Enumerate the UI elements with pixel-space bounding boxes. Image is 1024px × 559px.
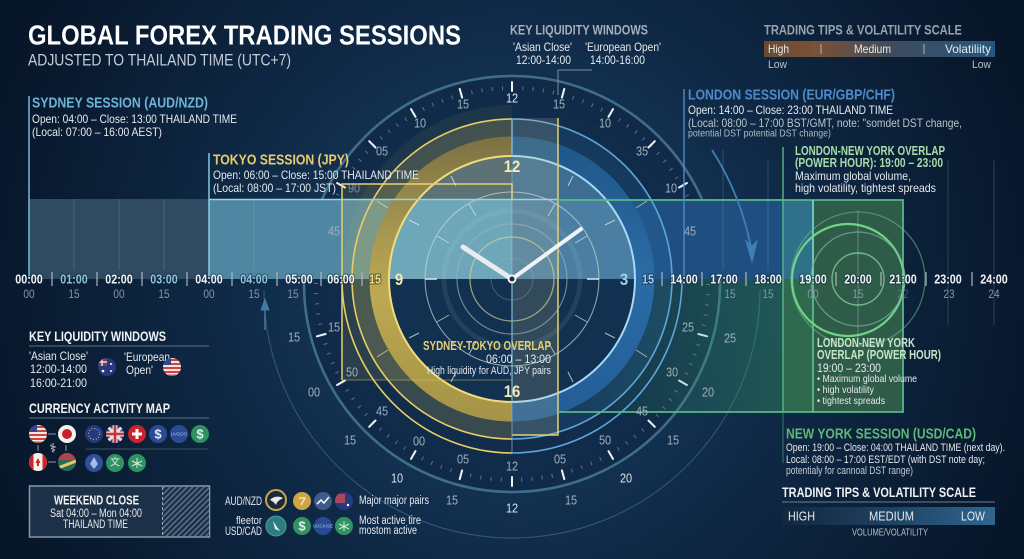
time axis: 15 [724, 289, 736, 301]
currency pair legend: Most active tire [359, 515, 421, 527]
Tokyo session text: TOKYO SESSION (JPY) [213, 152, 349, 168]
dial numerals: 10 [391, 470, 403, 486]
icon: Australia flag small [335, 492, 353, 510]
icon: green leaf [128, 454, 146, 472]
currency pair legend: USD/CAD [225, 524, 262, 538]
trading tips and volatility scale top: TRADING TIPS & VOLATILITY SCALE [764, 22, 962, 38]
time axis: 15 [158, 289, 170, 301]
currency pair legend [225, 490, 429, 538]
key liquidity windows left panel: 12:00-14:00 [30, 362, 87, 376]
currency pair legend: Major major pairs [359, 495, 429, 507]
trading tips and volatility scale top: High [768, 42, 789, 56]
time axis: 24 [988, 289, 1000, 301]
dial numerals: 45 [376, 403, 388, 419]
time axis: 15 [287, 289, 299, 301]
time axis: 15 [248, 289, 260, 301]
dial numerals: 15 [667, 432, 679, 448]
London-New York overlap text top: (POWER HOUR): 19:00 – 23:00 [795, 156, 943, 170]
Sydney-Tokyo overlap text: SYDNEY-TOKYO OVERLAP [423, 339, 551, 353]
inner concentric circles and clock ticks [377, 119, 647, 453]
dial numerals: 05 [376, 143, 388, 159]
dial numerals: 15 [288, 329, 300, 345]
Sydney-Tokyo overlap text [423, 339, 551, 377]
icon: Canada flag [29, 453, 47, 471]
dial numerals: 15 [565, 492, 577, 508]
time axis: 21:00 [889, 273, 917, 287]
band: London to NY transition [783, 200, 813, 279]
time axis: 15 [852, 289, 864, 301]
time axis: 18:00 [754, 273, 782, 287]
London-New York overlap text top [795, 144, 945, 195]
clock hour numbers: 9 [395, 271, 403, 289]
time axis: 04:00 [240, 273, 268, 287]
Sydney session text [32, 94, 237, 139]
icon: US flag [163, 358, 181, 376]
weekend close box: Sat 04:00 – Mon 04:00 [50, 508, 142, 520]
London-New York overlap text lower [817, 336, 941, 407]
arrow: clockwise Asia [261, 299, 269, 330]
Sydney-Tokyo overlap text: High liquidity for AUD, JPY pairs [427, 365, 551, 377]
band: Sydney [29, 199, 209, 279]
icon: green dollar [191, 425, 209, 443]
title: ADJUSTED TO THAILAND TIME (UTC+7) [28, 50, 291, 70]
dial numerals: 45 [684, 223, 696, 239]
band: London [512, 199, 783, 279]
icon: UK flag [106, 425, 124, 443]
trading tips and volatility scale top: Low [972, 59, 991, 71]
dial numerals: 25 [724, 330, 736, 346]
key liquidity windows left panel: KEY LIQUIDITY WINDOWS [29, 328, 166, 344]
icon: euro [85, 425, 103, 443]
currency activity map: CURRENCY ACTIVITY MAP [29, 400, 170, 416]
key liquidity windows top: 12:00-14:00 [516, 53, 571, 67]
clock hour numbers [395, 158, 628, 401]
icon: blue dollar [149, 425, 167, 443]
dial numerals: 00 [308, 384, 320, 400]
London-New York overlap text top: high volatility, tightest spreads [795, 181, 936, 195]
time axis: 15 [762, 289, 774, 301]
dial numerals: 25 [682, 319, 694, 335]
icon: link symbol: ⚕ [49, 440, 57, 456]
dial numerals: 05 [457, 451, 469, 467]
time axis: 05:00 [285, 273, 313, 287]
icon: Swiss flag [128, 425, 146, 443]
time axis: 20:00 [844, 273, 872, 287]
key liquidity windows top: 'European Open' [585, 40, 661, 54]
time axis: 23:00 [934, 273, 962, 287]
Sydney session text: SYDNEY SESSION (AUD/NZD) [32, 94, 208, 112]
clock hour numbers: 16 [504, 383, 520, 401]
key liquidity windows left panel: Open' [126, 363, 153, 377]
icon: ethereum [85, 454, 103, 472]
weekend close box [30, 486, 210, 537]
dial numerals: 20 [702, 384, 714, 400]
currency pair legend: AUD/NZD [225, 494, 262, 508]
Sydney session text: (Local: 07:00 – 16:00 AEST) [32, 125, 162, 139]
trading tips and volatility scale top: Low [768, 59, 787, 71]
clock hands [463, 229, 581, 282]
icon: blue token: UDCKISE [313, 524, 333, 528]
currency activity map [29, 400, 209, 472]
dial numerals: 45 [636, 403, 648, 419]
time axis: 00 [203, 289, 215, 301]
trading tips and volatility scale bottom: MEDIUM [869, 508, 914, 524]
time axis: 15 [369, 273, 381, 287]
dial numerals: 10 [599, 115, 611, 131]
gold ring outline [389, 156, 512, 402]
trading tips and volatility scale bottom: HIGH [788, 508, 815, 524]
icon: blue coin [170, 425, 188, 443]
London-New York overlap text lower: 19:00 – 23:00 [817, 361, 881, 375]
trading tips and volatility scale top: Medium [854, 42, 891, 56]
faint vertical guide lines [74, 150, 994, 325]
band: New York green fill [813, 200, 903, 412]
icon: green dollar small [293, 517, 311, 535]
key liquidity windows top: 14:00-16:00 [590, 53, 645, 67]
icon: blue token [313, 517, 333, 535]
top band edge lines [209, 200, 903, 412]
time axis: 00 [807, 289, 819, 301]
currency pair legend: fleetor [236, 515, 262, 527]
time axis: 02:00 [105, 273, 133, 287]
dial numerals: 15 [446, 492, 458, 508]
blue ring outline [512, 156, 635, 402]
time axis: 15 [642, 273, 654, 287]
dial numerals: 15 [344, 432, 356, 448]
overlap rectangle: Sydney-Tokyo [342, 118, 558, 435]
icon: green character: 文 [110, 456, 120, 468]
Tokyo session text: Open: 06:00 – Close: 15:00 THAILAND TIME [213, 168, 419, 182]
session bands [29, 199, 903, 412]
London-New York overlap text lower: • Maximum global volume [817, 373, 917, 385]
New York session text [786, 426, 1005, 477]
dial numerals: 20 [620, 470, 632, 486]
icon: chart [314, 492, 332, 510]
time axis: 00 [23, 289, 35, 301]
dial numerals: 15 [553, 96, 565, 112]
time axis: 24:00 [980, 273, 1008, 287]
dial numerals: 12 [506, 458, 518, 474]
clock outer dial [264, 76, 760, 538]
dial numerals: 90 [348, 180, 360, 196]
trading tips and volatility scale bottom [782, 484, 995, 538]
clock hour numbers: 12 [504, 158, 520, 176]
band: Tokyo [209, 199, 512, 279]
time axis: 15 [68, 289, 80, 301]
trading tips and volatility scale bottom: TRADING TIPS & VOLATILITY SCALE [782, 484, 976, 500]
time axis: 17:00 [710, 273, 738, 287]
time axis: 22 [897, 289, 909, 301]
icon: South Africa flag [58, 453, 76, 471]
title: GLOBAL FOREX TRADING SESSIONS [28, 20, 461, 50]
inner clock disc [390, 157, 634, 401]
dial numerals: 15 [328, 319, 340, 335]
session vertical markers [29, 70, 783, 463]
dial numerals: 10 [665, 180, 677, 196]
weekend close box: WEEKEND CLOSE [54, 492, 139, 508]
time axis: 01:00 [60, 273, 88, 287]
icon: Japan flag [58, 425, 76, 443]
arrow: clockwise London [712, 150, 757, 262]
dial numerals [288, 90, 736, 516]
currency pair legend: mostom active [359, 525, 417, 537]
Tokyo session text: (Local: 08:00 – 17:00 JST) [213, 181, 336, 195]
time axis: 04:00 [195, 273, 223, 287]
trading tips and volatility scale bottom: LOW [961, 508, 986, 524]
dial numerals: 35 [636, 143, 648, 159]
time axis: 14:00 [670, 273, 698, 287]
time axis: 23 [943, 289, 955, 301]
clock hour numbers: 3 [620, 271, 628, 289]
London-New York overlap text top: LONDON-NEW YORK OVERLAP [795, 144, 945, 158]
icon: green dollar small: $ [298, 518, 306, 534]
key liquidity windows top [510, 22, 661, 67]
dial numerals: 12 [506, 500, 518, 516]
blue half rings: London session [512, 119, 682, 453]
dial numerals: 50 [599, 432, 611, 448]
yellow overlap tint [342, 184, 512, 380]
dial numerals: 10 [414, 115, 426, 131]
London-New York overlap text lower: LONDON-NEW YORK [817, 336, 915, 350]
dial numerals: 30 [666, 364, 678, 380]
key liquidity windows left panel: 'European [124, 350, 170, 364]
time axis: 06:00 [327, 273, 355, 287]
icon: gold coin [293, 492, 311, 510]
dial numerals: 45 [328, 223, 340, 239]
icon: teal emblem [266, 516, 286, 536]
yellow half rings: Asian sessions [342, 105, 512, 453]
dial numerals: 50 [346, 364, 358, 380]
key liquidity windows top: 'Asian Close' [513, 40, 572, 54]
trading tips and volatility scale bottom: VOLUME/VOLATILITY [852, 528, 928, 538]
key liquidity windows left panel: 16:00-21:00 [30, 376, 87, 390]
time axis [15, 272, 1008, 301]
icon: blue coin: UVDDO [171, 432, 188, 436]
Sydney session text: Open: 04:00 – Close: 13:00 THAILAND TIME [32, 112, 237, 126]
key liquidity windows left panel [29, 332, 209, 387]
icon: green leaf small [335, 517, 353, 535]
London session text: potential DST potential DST change) [688, 128, 831, 140]
weekend close box: THAILAND TIME [63, 519, 128, 531]
London session text [688, 86, 962, 140]
Tokyo session text [213, 152, 419, 195]
icon: gold emblem [266, 490, 286, 510]
icon: blue dollar: $ [154, 426, 162, 442]
time axis: 19:00 [799, 273, 827, 287]
time axis: 00 [113, 289, 125, 301]
time axis: 03:00 [150, 273, 178, 287]
dial numerals: 05 [554, 451, 566, 467]
New York session text: NEW YORK SESSION (USD/CAD) [786, 426, 976, 442]
trading tips and volatility scale top: Volatiliity [945, 42, 991, 56]
icon: US flag [29, 425, 47, 443]
icon: green character [106, 454, 124, 472]
green circles: London-New York overlap [791, 210, 925, 346]
dial numerals: 00 [413, 433, 425, 449]
dial numerals: 12 [506, 90, 518, 106]
band: green lower tint [558, 279, 783, 412]
London-New York overlap text lower: OVERLAP (POWER HOUR) [817, 348, 941, 362]
Sydney-Tokyo overlap text: 06:00 – 13:00 [486, 352, 551, 366]
London session text: (Local: 08:00 – 17:00 BST/GMT, note: "somdet DST change, [688, 116, 962, 130]
London session text: LONDON SESSION (EUR/GBP/CHF) [688, 86, 895, 104]
London-New York overlap text top: Maximum global volume, [795, 169, 911, 183]
icon: Australia flag [98, 358, 116, 376]
title [28, 20, 461, 70]
key liquidity windows top: KEY LIQUIDITY WINDOWS [510, 22, 648, 38]
key liquidity windows left panel: 'Asian Close' [29, 349, 88, 363]
London-New York overlap text lower: • tightest spreads [817, 395, 885, 407]
New York session text: potentialy for cannoal DST range) [786, 465, 913, 477]
trading tips and volatility scale top [764, 22, 995, 71]
dial numerals: 15 [457, 96, 469, 112]
time axis: 00:00 [15, 273, 43, 287]
icon: green dollar: $ [196, 426, 204, 442]
London-New York overlap text lower: • high volatility [817, 384, 875, 396]
London session text: Open: 14:00 – Close: 23:00 THAILAND TIME [688, 103, 893, 117]
